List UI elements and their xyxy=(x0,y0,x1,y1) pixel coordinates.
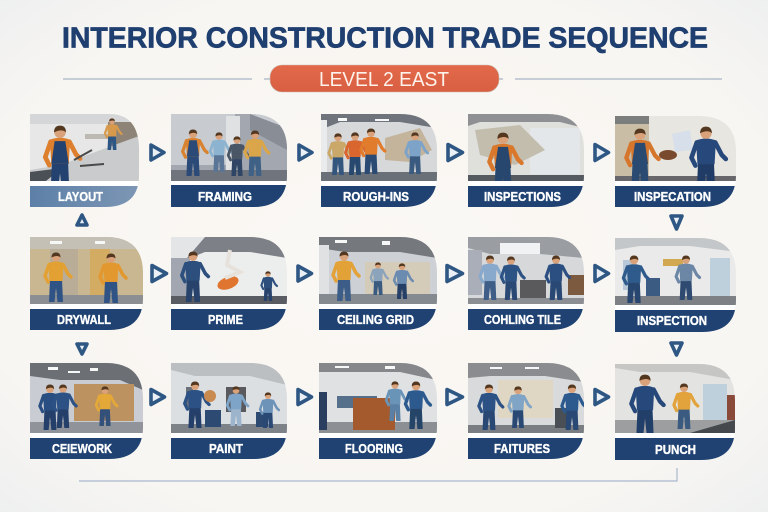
card: layout xyxy=(30,114,140,207)
title: INTERIOR CONSTRUCTION TRADE SEQUENCE xyxy=(62,22,708,54)
label: FAITURES xyxy=(494,442,550,456)
subtitle text: LEVEL 2 EAST xyxy=(319,69,449,91)
arrow: ceiling grid to coiling tile xyxy=(447,266,462,282)
arrow: layout to framing xyxy=(151,145,164,160)
card: flooring xyxy=(319,363,438,459)
card: drywall xyxy=(30,237,144,330)
card: punch xyxy=(615,364,736,460)
subtitle pill xyxy=(270,65,499,92)
arrow: inspections to inspecation xyxy=(595,144,608,160)
arrow: flooring to fixtures xyxy=(447,390,462,404)
card: ceiling grid xyxy=(319,237,438,330)
arrow: prime to ceiling grid xyxy=(298,266,312,281)
card: paint xyxy=(171,363,288,459)
label: CEIEWORK xyxy=(52,442,112,456)
arrow: drywall down to ceiework xyxy=(77,344,87,354)
arrow: drywall to prime xyxy=(152,266,166,282)
arrow: inspecation down to inspection xyxy=(671,216,682,229)
label: INSPECTIONS xyxy=(484,190,561,204)
label: FRAMING xyxy=(198,190,252,204)
bottom bracket line xyxy=(79,468,677,481)
label: COHLING TILE xyxy=(484,313,561,327)
arrow: fixtures to punch xyxy=(595,390,608,404)
arrow: rough-ins to inspections xyxy=(448,144,462,160)
label: ROUGH-INS xyxy=(343,190,409,204)
header divider: left xyxy=(63,78,270,80)
card: coiling tile xyxy=(468,237,585,330)
card: rough-ins xyxy=(321,114,438,207)
card: inspection xyxy=(615,238,737,332)
arrow: drywall up to layout xyxy=(77,215,87,225)
label: DRYWALL xyxy=(57,313,111,327)
label: PUNCH xyxy=(655,443,696,457)
label: INSPECATION xyxy=(634,190,711,204)
arrow: framing to rough-ins xyxy=(299,145,312,160)
header divider: right xyxy=(499,78,722,80)
card: inspections xyxy=(468,114,585,207)
card: ceiework xyxy=(30,363,144,459)
label: CEILING GRID xyxy=(337,313,414,327)
card: inspecation xyxy=(615,116,737,207)
card: framing xyxy=(171,114,288,207)
label: PAINT xyxy=(209,442,243,456)
arrow: ceiework to paint xyxy=(151,390,164,404)
card: prime xyxy=(171,237,288,330)
arrow: inspection down to punch xyxy=(671,343,682,355)
label: INSPECTION xyxy=(637,314,707,328)
label: PRIME xyxy=(208,313,243,327)
arrow: paint to flooring xyxy=(298,390,312,404)
label: FLOORING xyxy=(345,442,403,456)
label: LAYOUT xyxy=(58,190,103,204)
arrow: coiling tile to inspection xyxy=(595,266,608,282)
card: fixtures xyxy=(468,363,586,459)
